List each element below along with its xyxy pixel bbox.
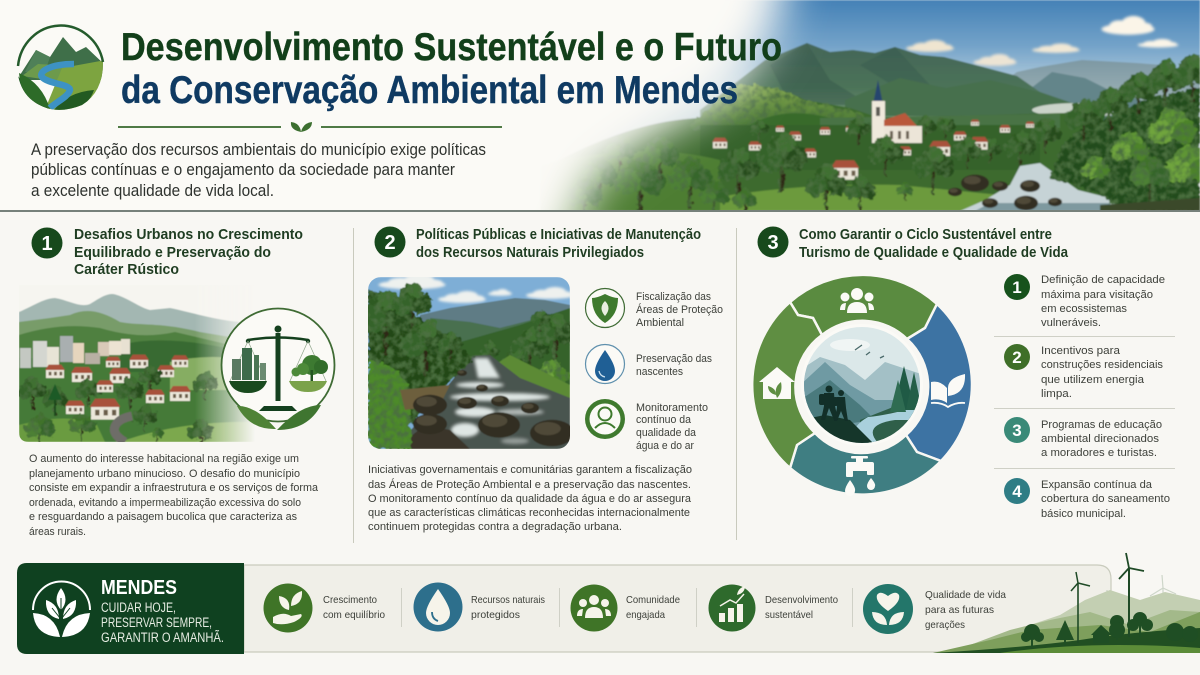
paragraph 1: O aumento do interesse habitacional na região exige um	[29, 453, 299, 465]
segment: water	[790, 433, 941, 496]
panel: ciclo sustentável	[752, 226, 1175, 520]
badge 2	[374, 226, 406, 258]
paragraph 2: das Áreas de Proteção Ambiental e a preservação das nascentes.	[368, 478, 691, 491]
paragraph 1	[29, 453, 319, 538]
heading 1: Caráter Rústico	[74, 261, 179, 278]
label: fiscalização	[636, 291, 723, 329]
subtitle: a excelente qualidade de vida local.	[31, 182, 274, 200]
label: monitoramento: água e do ar	[636, 440, 694, 452]
title: Desenvolvimento Sustentável e o Futuro	[121, 26, 782, 69]
left forest	[368, 282, 476, 425]
heading 3	[799, 226, 1069, 261]
cycle diagram	[752, 275, 972, 496]
list item 4	[1004, 478, 1170, 520]
paragraph 1: ordenada, evitando a impermeabilização excessiva do solo	[29, 497, 301, 509]
item: crescimento: com equilíbrio	[323, 609, 385, 621]
segment: education	[906, 304, 972, 461]
item: crescimento	[264, 584, 385, 632]
turbines	[1071, 553, 1144, 643]
icon: leaves emblem	[33, 582, 90, 637]
list item 1: vulneráveis.	[1041, 317, 1101, 329]
label: nascentes: Preservação das	[636, 353, 712, 365]
list item 4: Expansão contínua da	[1041, 479, 1153, 491]
panel: mendes slogan: MENDES	[101, 577, 177, 599]
paragraph 1: áreas rurais.	[29, 526, 86, 538]
list item 4: 4	[1012, 482, 1022, 501]
item: desenvolvimento: Desenvolvimento	[765, 594, 838, 606]
badge 3	[758, 226, 788, 258]
list item 2: Incentivos para	[1041, 345, 1121, 357]
center scene: hikers	[804, 327, 920, 443]
hero landscape photo	[544, 0, 1200, 210]
item: recursos	[414, 582, 545, 632]
label: monitoramento: Monitoramento	[636, 402, 708, 414]
list item 3: ambiental direcionados	[1041, 433, 1159, 445]
list item 2	[1004, 344, 1163, 400]
list item 3	[1004, 417, 1162, 459]
foreground trees	[583, 132, 982, 210]
item: recursos: Recursos naturais	[471, 594, 545, 606]
header panel	[0, 0, 1200, 219]
paragraph 2: continuem protegidas contra a degradação urbana.	[368, 521, 622, 533]
paragraph 1: consiste em expandir a infraestrutura e os serviços de forma	[29, 482, 319, 494]
title	[121, 26, 782, 112]
panel: mendes slogan: GARANTIR O AMANHÃ.	[101, 630, 224, 645]
footer strip	[17, 553, 1200, 654]
list item 4: cobertura do saneamento	[1041, 493, 1170, 505]
subtitle: A preservação dos recursos ambientais do município exige políticas	[31, 141, 486, 159]
church	[874, 80, 882, 102]
list item 3: 3	[1012, 421, 1022, 440]
heading 1: Desafios Urbanos no Crescimento	[74, 226, 303, 243]
panel: desafios urbanos	[18, 226, 334, 538]
illustration: town and hills	[19, 294, 252, 442]
right forest	[1050, 54, 1200, 211]
title: da Conservação Ambiental em Mendes	[121, 69, 738, 112]
paragraph 2: Iniciativas governamentais e comunitárias garantem a fiscalização	[368, 464, 692, 476]
segment: community	[790, 275, 937, 339]
heading 3: Turismo de Qualidade e Qualidade de Vida	[799, 244, 1069, 261]
item: qualidade de vida: Qualidade de vida	[925, 589, 1006, 601]
icon: water drop	[586, 344, 624, 384]
icon: balance scale	[222, 308, 334, 430]
label: monitoramento: qualidade da	[636, 427, 697, 439]
subtitle: públicas contínuas e o engajamento da sociedade para manter	[31, 161, 455, 179]
town band	[700, 125, 1040, 170]
list item 2: construções residenciais	[1041, 359, 1163, 371]
label: nascentes	[636, 353, 712, 378]
label: monitoramento: contínuo da	[636, 414, 692, 426]
label: monitoramento	[636, 402, 708, 452]
panel: mendes slogan	[17, 563, 244, 654]
logo	[16, 24, 104, 110]
heading 3: Como Garantir o Ciclo Sustentável entre	[799, 226, 1052, 243]
label: nascentes: nascentes	[636, 366, 683, 378]
paragraph 2	[368, 464, 692, 533]
label: fiscalização: Áreas de Proteção	[636, 303, 723, 316]
panel: mendes slogan: CUIDAR HOJE,	[101, 600, 176, 615]
river water	[395, 355, 570, 449]
item: crescimento: Crescimento	[323, 594, 377, 606]
panel: políticas públicas	[356, 226, 723, 533]
badge 2: 2	[384, 232, 396, 254]
list item 2: que utilizem energia	[1041, 374, 1145, 386]
item: qualidade de vida: para as futuras	[925, 604, 994, 616]
item: qualidade de vida	[863, 584, 1006, 634]
badge 1: 1	[41, 233, 53, 255]
list item 1	[1004, 274, 1165, 329]
list item 4: básico municipal.	[1041, 508, 1126, 520]
paragraph 2: O monitoramento contínuo da qualidade da água e do ar assegura	[368, 493, 692, 505]
heading 2: dos Recursos Naturais Privilegiados	[416, 244, 644, 261]
badge 1	[32, 228, 62, 258]
list item 1: 1	[1012, 278, 1022, 297]
item: comunidade	[570, 584, 680, 632]
list item 1: máxima para visitação	[1041, 289, 1153, 301]
paragraph 1: e resguardando a paisagem bucolica que caracteriza as	[29, 511, 297, 523]
label: fiscalização: Fiscalização das	[636, 291, 711, 303]
trees and house	[1021, 612, 1198, 647]
item: comunidade: engajada	[626, 609, 665, 621]
item: desenvolvimento: sustentável	[765, 609, 813, 621]
river	[960, 162, 1112, 210]
foreground grass	[700, 185, 1000, 211]
list item 1: em ecossistemas	[1041, 303, 1127, 315]
icon: shield	[586, 288, 624, 328]
paragraph 2: que as características climáticas reconhecidas internacionalmente	[368, 507, 690, 519]
icon: monitoring	[585, 399, 625, 439]
landscape with wind turbines	[933, 575, 1200, 653]
photo: river in the forest	[356, 274, 576, 449]
item: comunidade: Comunidade	[626, 594, 680, 606]
heading 2: Políticas Públicas e Iniciativas de Manutenção	[416, 226, 701, 243]
item: desenvolvimento	[708, 584, 838, 632]
paragraph 1: planejamento urbano minucioso. O desafio do município	[29, 468, 300, 480]
list item 3: Programas de educação	[1041, 419, 1162, 431]
panel: mendes slogan: PRESERVAR SEMPRE,	[101, 615, 212, 630]
list item 2: limpa.	[1041, 388, 1072, 400]
list item 3: a moradores e turistas.	[1041, 447, 1157, 459]
heading 1	[74, 226, 303, 278]
heading 2	[416, 226, 701, 261]
badge 3: 3	[767, 232, 779, 254]
label: fiscalização: Ambiental	[636, 317, 684, 329]
item: qualidade de vida: gerações	[925, 619, 965, 631]
subtitle	[31, 141, 486, 200]
list item 1: Definição de capacidade	[1041, 274, 1165, 286]
list item 2: 2	[1012, 348, 1022, 367]
segment: housing	[752, 302, 822, 468]
heading 1: Equilibrado e Preservação do	[74, 244, 271, 261]
title divider with leaf	[118, 122, 502, 132]
item: recursos: protegidos	[471, 609, 520, 621]
